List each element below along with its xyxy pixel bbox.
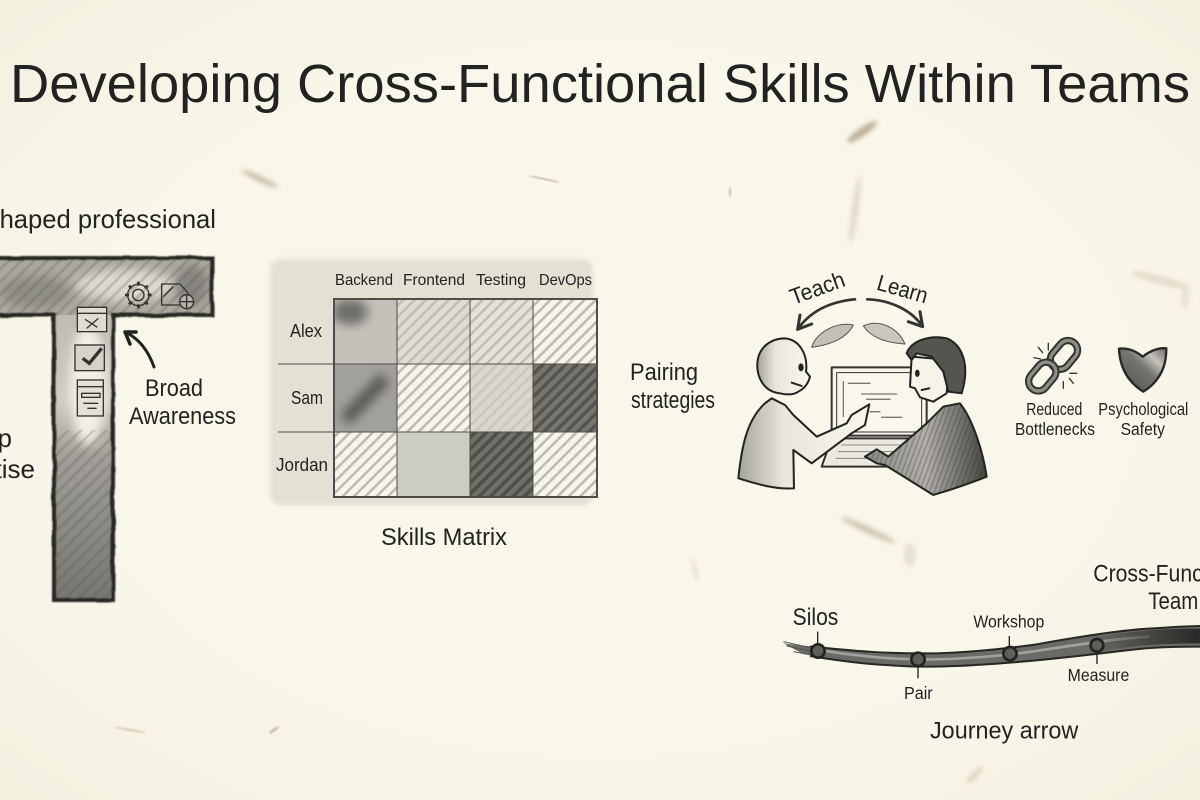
label: Deep Expertise: [0, 423, 35, 484]
stop: Workshop: [1003, 636, 1017, 660]
label: Learn: Learn: [874, 269, 931, 308]
arrow: learn: [867, 299, 923, 327]
person: teacher: [738, 338, 869, 489]
matrix cells: [332, 299, 597, 497]
icon: window with cross: [77, 307, 107, 332]
text: Reduced Bottlenecks: [1015, 399, 1095, 439]
icon: gear: [125, 282, 152, 308]
stop: Pair: [911, 653, 925, 678]
text: Reduced Bottlenecks: Reduced: [1026, 399, 1082, 419]
panel: T-shaped professional: [0, 204, 236, 600]
label: Pairing strategies: strategies: [631, 387, 715, 414]
panel: journey arrow: [783, 561, 1200, 744]
label: Broad Awareness: [129, 375, 236, 430]
icon: broken chain link: [1025, 337, 1082, 395]
icon: document: [77, 380, 103, 416]
icon: check box: [75, 345, 104, 371]
column headers: Backend: [335, 272, 393, 289]
column headers: DevOps: [539, 272, 592, 289]
panel: pairing illustration: [738, 266, 987, 495]
laptop: [822, 367, 932, 467]
label: Broad Awareness: Broad: [145, 375, 203, 402]
journey stops: [811, 632, 1103, 678]
icon: right feather: [863, 323, 905, 344]
panel: outcomes: [1015, 337, 1188, 439]
icon: left feather: [812, 324, 853, 347]
T shape: [0, 258, 212, 600]
person: learner: [865, 337, 987, 495]
row headers: [276, 321, 328, 475]
title: Developing Cross-Functional Skills Within Teams: [10, 54, 1190, 114]
caption: Journey arrow: Journey arrow: [930, 717, 1079, 744]
label: Measure: Measure: [1068, 665, 1129, 685]
label: Teach: Teach: [786, 266, 848, 310]
text: Psychological Safety: [1098, 399, 1188, 439]
column headers: Testing: [476, 272, 526, 289]
stop: Measure: [1091, 639, 1103, 664]
label: Broad Awareness: Awareness: [129, 403, 236, 430]
row headers: Jordan: [276, 455, 328, 475]
text: Reduced Bottlenecks: Bottlenecks: [1015, 419, 1095, 439]
outcome: reduced bottlenecks: [1015, 337, 1095, 439]
label: Pairing strategies: Pairing: [630, 359, 698, 386]
label: Pair: Pair: [904, 683, 933, 703]
label: Pairing strategies: [630, 359, 715, 414]
arrow to T bar: [125, 332, 154, 367]
caption: Skills Matrix: Skills Matrix: [381, 524, 507, 551]
row headers: Alex: [290, 321, 322, 341]
label: Cross-Functional Team: [1093, 561, 1200, 615]
label: Workshop: Workshop: [973, 611, 1044, 631]
matrix backdrop: [270, 259, 593, 505]
row headers: Sam: [291, 388, 323, 408]
label: Silos: Silos: [793, 604, 838, 631]
column headers: [335, 272, 592, 289]
stop: Silos: [811, 632, 825, 658]
arrow: teach: [798, 299, 855, 329]
icons in T shape: [75, 282, 194, 416]
icon: heart shield: [1119, 348, 1166, 392]
text: Psychological Safety: Safety: [1121, 419, 1165, 439]
paper stains: [114, 118, 1190, 786]
journey path: [783, 626, 1200, 667]
column headers: Frontend: [403, 272, 465, 289]
outcome: psychological safety: [1098, 348, 1188, 439]
matrix grid: [278, 299, 597, 497]
panel: skills matrix: [270, 259, 597, 551]
icon: browser with globe: [162, 284, 194, 309]
